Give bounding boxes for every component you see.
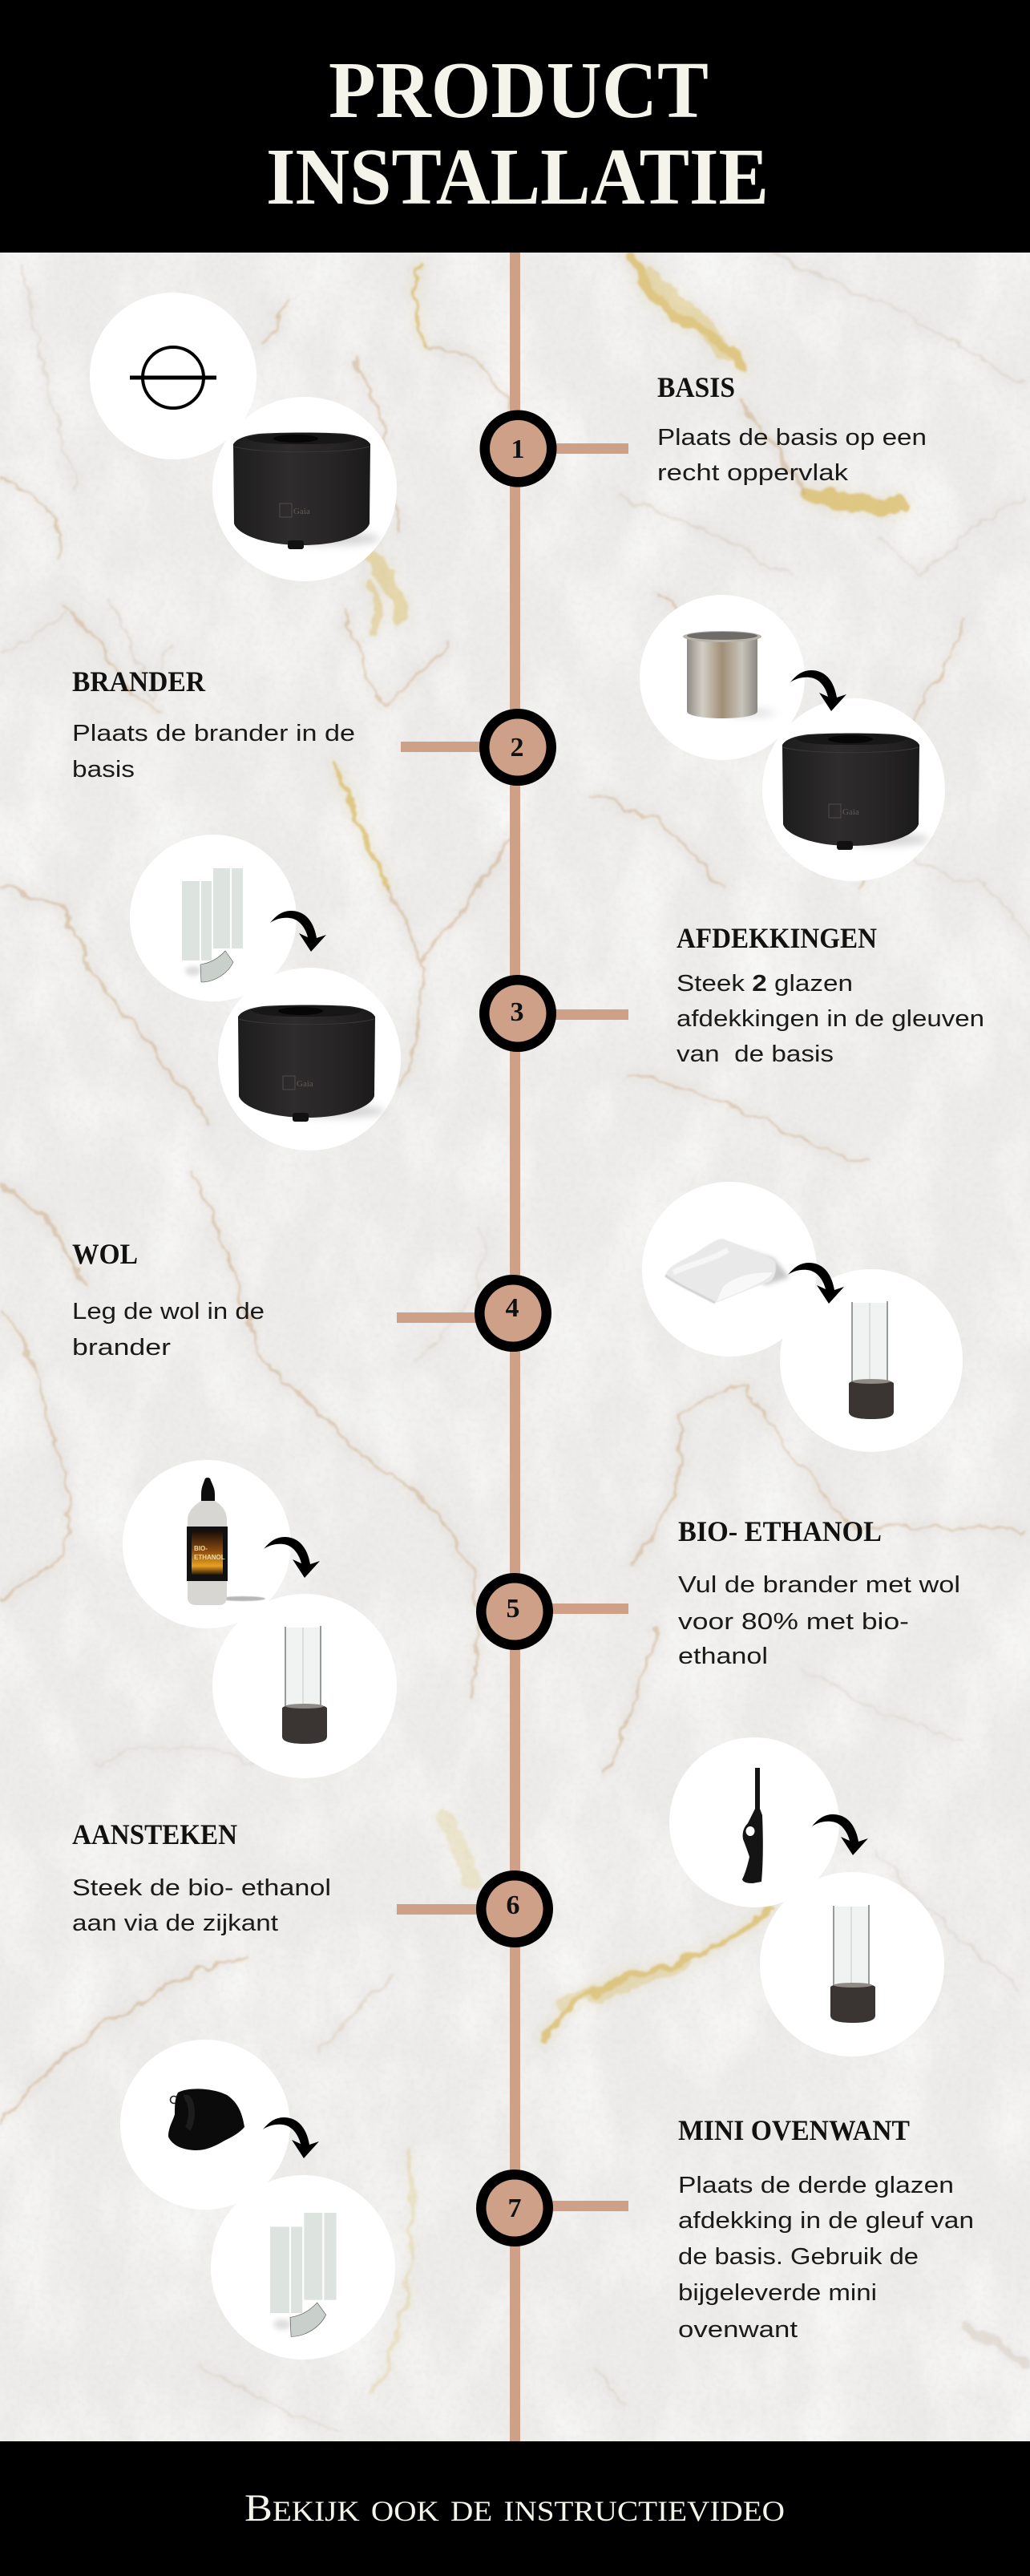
arrow [790,670,846,711]
step 1: basis [90,293,927,581]
heading: bio-ethanol: BIO- ETHANOL [678,1515,882,1547]
node 1: 1 [511,435,524,464]
step 5: bio-ethanol [123,1460,960,1778]
product: black base [782,733,929,850]
product: steel burner cup [683,631,775,718]
step 7: mini ovenwant [120,2040,974,2360]
text: aansteken: aan via de zijkant [72,1911,278,1936]
text: afdekkingen: Steek 2 glazen [677,971,853,997]
text: brander: basis [72,757,135,783]
step 3: afdekkingen [130,835,984,1151]
heading: wol: WOL [72,1238,138,1270]
arrow [788,1263,844,1304]
text: brander: Plaats de brander in de [72,721,355,746]
node 3: 3 [510,997,524,1027]
text: wol [72,1299,265,1361]
node 1 [479,410,556,487]
heading: mini ovenwant: MINI OVENWANT [678,2114,910,2146]
images: mini ovenwant [120,2040,395,2360]
title: PRODUCT [329,45,709,135]
node 4: 4 [505,1293,519,1323]
text: bio-ethanol: ethanol [678,1644,768,1669]
product: black base [238,1005,385,1122]
text: basis: Plaats de basis op een [657,425,927,451]
text: wol: Leg de wol in de [72,1299,265,1324]
text: afdekkingen: van de basis [677,1041,834,1067]
node 4 [475,1275,551,1352]
text: afdekkingen: afdekkingen in de gleuven [677,1006,984,1032]
product: bio-ethanol bottle: BIO- [194,1545,208,1552]
text: bio-ethanol [678,1572,960,1669]
text: basis [657,425,927,486]
connector 4 [397,1312,477,1323]
node 2: 2 [510,733,524,762]
text: mini ovenwant: de basis. Gebruik de [678,2244,919,2270]
text: mini ovenwant: bijgeleverde mini [678,2280,877,2306]
step 2: brander [72,595,945,881]
product: bio-ethanol bottle [187,1478,265,1605]
arrow [270,911,326,952]
text: mini ovenwant: afdekking in de gleuf van [678,2208,974,2234]
connector 7 [550,2201,628,2211]
footer band [0,2441,1030,2576]
connector 5 [550,1603,628,1614]
text: mini ovenwant: Plaats de derde glazen [678,2173,954,2198]
connector 6 [397,1904,477,1915]
images: aansteken [669,1737,944,2056]
arrow [264,1537,320,1578]
product: burner with glass [830,1905,875,2023]
connector 1 [553,443,628,454]
node 6: 6 [507,1891,519,1920]
heading: afdekkingen: AFDEKKINGEN [677,922,877,954]
text: bio-ethanol: voor 80% met bio- [678,1609,909,1635]
product: black base [233,433,380,549]
text: wol: brander [72,1335,171,1361]
product: glass panels [270,2213,337,2336]
product: black base: Gaia [297,1079,313,1089]
node 6 [476,1870,553,1947]
node 2 [479,709,556,786]
step 4: wol [72,1182,963,1452]
product: bio-ethanol bottle: ETHANOL [194,1554,225,1561]
product: oven mitt [168,2089,244,2150]
step 6: aansteken [72,1737,944,2056]
icon: flat surface symbol [130,347,216,408]
node 3 [479,975,556,1052]
text: mini ovenwant [678,2173,974,2343]
images: bio-ethanol [123,1460,397,1778]
images: afdekkingen [130,835,401,1151]
images: wol [642,1182,963,1452]
title: INSTALLATIE [266,131,769,221]
product: glass panels [182,868,243,982]
heading: brander: BRANDER [72,665,206,698]
connector 2 [401,742,481,752]
footer text: Bekijk ook de instructievideo [244,2485,785,2530]
arrow [263,2117,319,2158]
product: gas lighter [742,1768,763,1883]
header band [0,0,1030,253]
product: burner with glass [282,1626,327,1744]
product: burner with glass [849,1301,894,1419]
text: aansteken [72,1875,331,1936]
node 7 [476,2170,553,2246]
timeline vertical line [510,253,520,2441]
text: basis: recht oppervlak [657,460,849,486]
node 5: 5 [507,1594,519,1624]
images: brander [640,595,945,881]
arrow [812,1814,868,1855]
text: mini ovenwant: ovenwant [678,2317,798,2343]
product: black base: Gaia [293,507,310,516]
heading: aansteken: AANSTEKEN [72,1818,237,1850]
text: afdekkingen [677,971,984,1067]
node 5 [476,1573,553,1650]
heading: basis: BASIS [657,371,735,403]
text: brander [72,721,355,783]
node 7: 7 [508,2194,521,2223]
images: basis [90,293,397,581]
text: aansteken: Steek de bio- ethanol [72,1875,331,1901]
product: black base: Gaia [842,807,859,817]
connector 3 [553,1009,628,1020]
text: bio-ethanol: Vul de brander met wol [678,1572,960,1598]
title [266,45,769,221]
product: ceramic wool [665,1239,790,1303]
